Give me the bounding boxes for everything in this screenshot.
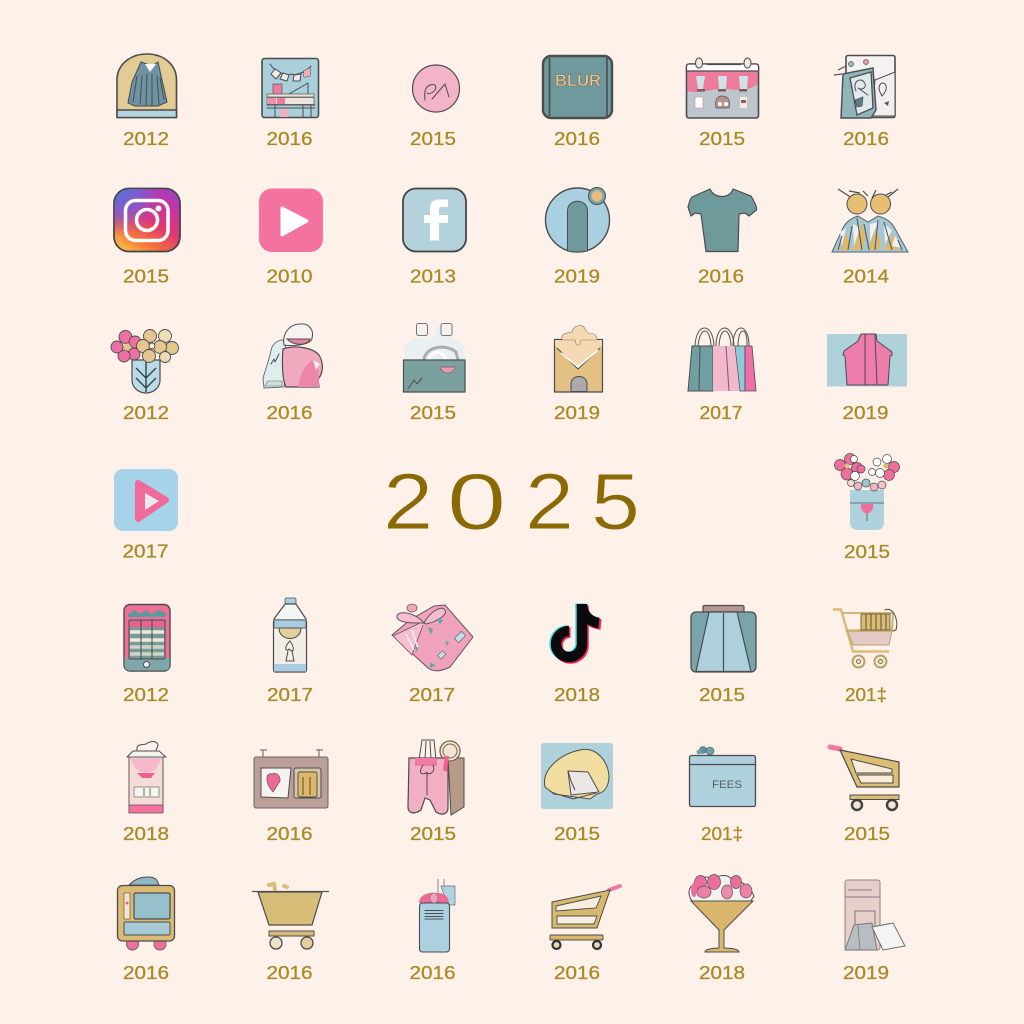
item: low cart 2016 [550, 886, 620, 983]
year label: 2010 [266, 266, 312, 286]
icon: flowers in vase [111, 330, 178, 393]
year label: 201‡ [845, 685, 887, 705]
icon: pillow on blue [541, 743, 613, 809]
year label: 2015 [844, 824, 890, 844]
item: shopping cart 2014 [833, 609, 897, 705]
year label: 2018 [699, 963, 745, 983]
year label: 2017 [267, 685, 313, 705]
item: two figures 2014 [832, 189, 908, 286]
year label: 2012 [123, 129, 169, 149]
year label: 2016 [554, 963, 600, 983]
icon: low shopping cart [550, 886, 620, 949]
item: tablet 2012 [123, 604, 170, 705]
item: shop window 2016 [262, 58, 318, 149]
item: tan envelope 2019 [554, 325, 602, 423]
year label: 2015 [410, 824, 456, 844]
year label: 2016 [698, 266, 744, 286]
icon: pink wrapped gift with bow [392, 604, 473, 671]
item: tiktok 2018 [554, 604, 601, 705]
year label: 2016 [266, 403, 312, 423]
icon: calendar [686, 58, 758, 118]
year label: 2013 [410, 266, 456, 286]
year label: 2019 [842, 403, 888, 423]
icon: glass with pink flowers [689, 874, 754, 952]
year label: 2016 [843, 129, 889, 149]
item: blue play button 2017 [114, 469, 178, 562]
icon: pink and pale figures [263, 324, 322, 388]
year label: 2015 [844, 542, 890, 562]
item: pink jar 2018 [123, 742, 169, 844]
icon: sketchy phones [834, 56, 895, 118]
icon: teal bag with white objects [404, 324, 465, 392]
year label: 2015 [410, 403, 456, 423]
year label: 2016 [266, 824, 312, 844]
title: year 2025 [383, 457, 640, 547]
icon: blue container with straws [419, 879, 455, 952]
year label: 201‡ [701, 824, 743, 844]
icon: tan shopping cart [830, 747, 899, 810]
year label: 2016 [266, 129, 312, 149]
year label: 2016 [123, 963, 169, 983]
icon: tiktok logo [554, 604, 601, 658]
item: tan pillow 2015 [541, 743, 613, 844]
item: blue container 2016 [410, 879, 456, 983]
icon: teal t-shirt [688, 189, 757, 252]
item: pink play button 2010 [259, 188, 323, 286]
icon: jar with lid [127, 742, 166, 813]
title: year 2025: 2 [525, 457, 574, 546]
icon: blue circle with arch [546, 188, 610, 252]
icon: pink outfit with bag [408, 740, 464, 815]
year label: 2019 [554, 266, 600, 286]
year label: 2018 [554, 685, 600, 705]
year label: 2015 [699, 685, 745, 705]
item: pink gift 2017 [392, 604, 473, 705]
item: cocktail glass 2018 [689, 874, 754, 983]
item: dress 2012 [117, 54, 176, 149]
year label: 2015 [123, 266, 169, 286]
year label: 2014 [843, 266, 889, 286]
item: building with papers 2019 [843, 880, 905, 983]
year label: 2016 [554, 129, 600, 149]
year label: 2015 [699, 129, 745, 149]
item: framed panels 2016 [254, 749, 328, 844]
item: flower jar 2015 [834, 454, 900, 562]
icon: bottle [274, 598, 306, 672]
year label: 2016 [266, 963, 312, 983]
year label: 2019 [843, 963, 889, 983]
item: skirt case 2015 [691, 606, 756, 705]
year label: 2017 [122, 542, 168, 562]
year label: 2012 [123, 403, 169, 423]
icon: envelope with door [554, 325, 602, 392]
icon: instagram logo [114, 188, 180, 252]
item: flower vase 2012 [111, 330, 178, 423]
icon: teal book: BLUR [555, 71, 601, 90]
item: instagram 2015 [114, 188, 180, 286]
year label: 2015 [554, 824, 600, 844]
title: year 2025: 0 [447, 457, 506, 546]
icon: blue box with label: FEES [712, 779, 742, 791]
item: blue box 2014 [690, 746, 756, 844]
icon: tablet with table [124, 604, 170, 671]
icon: jar with flowers [834, 454, 900, 530]
title: year 2025: 5 [591, 457, 640, 546]
year label: 2017 [409, 685, 455, 705]
item: t-shirt 2016 [688, 189, 757, 286]
icon: two figures in patterned dresses [832, 189, 908, 252]
item: shopping bags 2017 [688, 328, 756, 423]
year label: 2018 [123, 824, 169, 844]
icon: pink play [259, 188, 323, 252]
item: basket cart 2016 [252, 884, 329, 983]
item: pink circle logo 2015 [410, 65, 460, 149]
item: pink jumpsuit bag 2015 [408, 740, 464, 844]
icon: blue play [114, 469, 178, 531]
icon: shopping cart with goods [833, 609, 897, 668]
year label: 2019 [554, 403, 600, 423]
icon: basket on wheels [252, 884, 329, 949]
year label: 2012 [123, 685, 169, 705]
year label: 2015 [410, 129, 456, 149]
item: bottle 2017 [267, 598, 313, 705]
icon: pink jacket on blue [827, 334, 907, 386]
icon: skirt panel case [691, 606, 756, 672]
icon: dress in arch [117, 54, 176, 118]
icon: facebook logo [403, 188, 466, 252]
item: teal bag 2015 [404, 324, 465, 423]
item: circle arch 2019 [546, 188, 610, 286]
item: travel case 2016 [118, 877, 174, 983]
icon: row of shopping bags [688, 328, 756, 391]
item: phones 2016 [834, 56, 895, 149]
year label: 2016 [410, 963, 456, 983]
item: pink jacket 2019 [827, 334, 907, 423]
icon: pink building and paper stack [845, 880, 905, 950]
icon: pink circle monogram [412, 65, 460, 112]
icon: travel case on wheels [118, 877, 174, 950]
item: tan cart 2015 [830, 747, 899, 844]
item: calendar 2015 [686, 58, 758, 149]
item: facebook 2013 [403, 188, 466, 286]
item: book 2016 [543, 56, 612, 149]
icon: board with heart and jar [254, 749, 328, 808]
year label: 2017 [700, 403, 742, 423]
title: year 2025: 2 [383, 458, 433, 547]
icon: shop display [262, 58, 318, 118]
item: pink figure 2016 [263, 324, 322, 423]
